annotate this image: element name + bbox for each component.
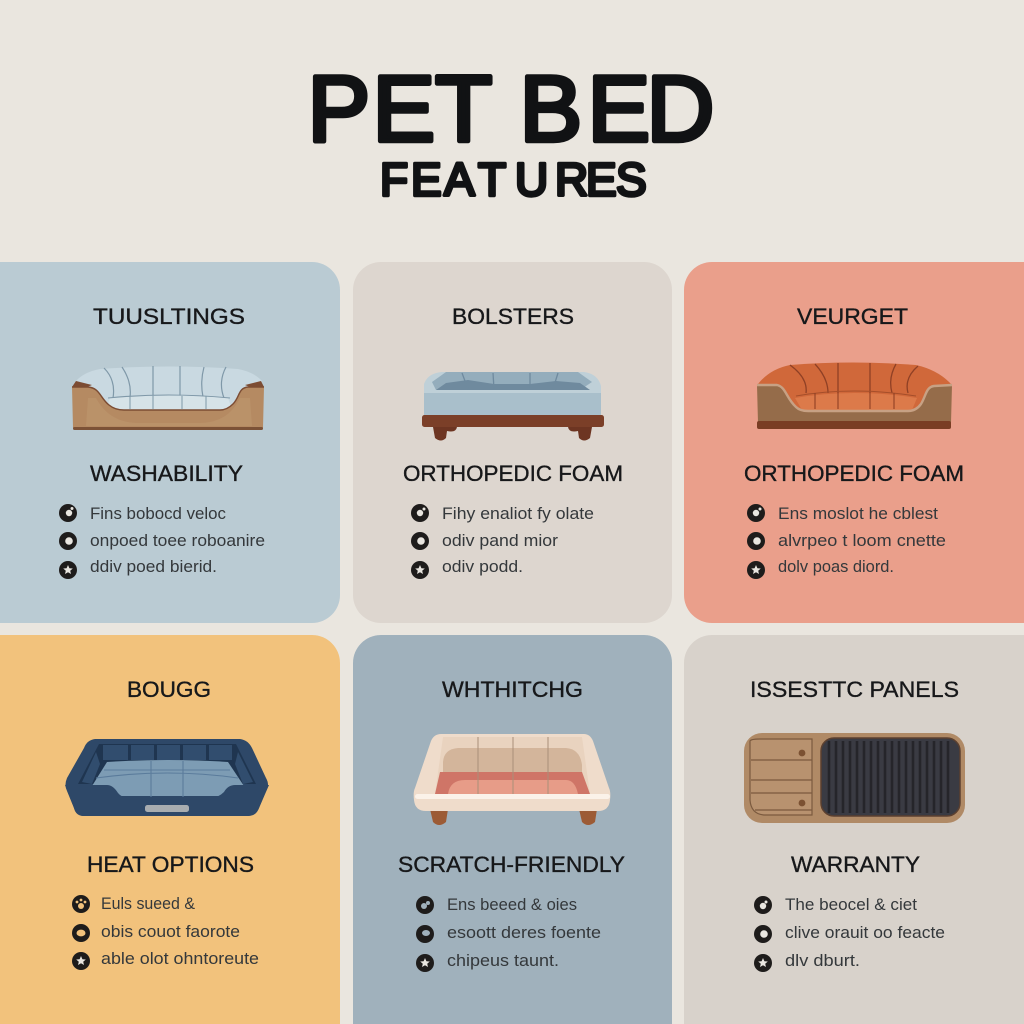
bullet icon xyxy=(411,504,429,522)
feature heading: WARRANTY xyxy=(791,852,920,877)
panel: tuusltings / washability xyxy=(0,262,340,623)
bullet icon xyxy=(416,896,434,914)
panel card xyxy=(0,262,340,623)
feature heading: HEAT OPTIONS xyxy=(87,852,254,877)
bullet icon xyxy=(59,504,77,522)
panel card xyxy=(684,262,1024,623)
bullet icon xyxy=(411,561,429,579)
bullet list xyxy=(747,504,946,579)
panel heading: TUUSLTINGS xyxy=(93,304,245,329)
bullet icon xyxy=(59,561,77,579)
bullet icon xyxy=(72,952,90,970)
bullet text: obis couot faorote xyxy=(101,923,240,941)
bullet list xyxy=(72,895,259,970)
feature heading: SCRATCH-FRIENDLY xyxy=(398,852,625,877)
panel heading: BOLSTERS xyxy=(452,304,574,329)
bullet text: onpoed toee roboanire xyxy=(90,532,265,550)
bullet icon xyxy=(411,532,429,550)
panel card xyxy=(684,635,1024,1024)
panel heading: VEURGET xyxy=(797,304,908,329)
bullet text: Fihy enaliot fy olate xyxy=(442,505,594,523)
bullet list xyxy=(411,504,594,579)
panel: bolsters / orthopedic foam xyxy=(353,262,672,623)
icon: brown sofa bed with orange cushions xyxy=(757,362,952,429)
panel heading: ISSESTTC PANELS xyxy=(750,677,959,702)
feature heading: WASHABILITY xyxy=(90,461,243,486)
bullet text: Ens beeed & oies xyxy=(447,896,577,914)
icon: raised blue bed on wooden frame xyxy=(422,372,604,440)
bullet icon xyxy=(416,925,434,943)
bullet list xyxy=(416,896,601,972)
bullet list xyxy=(59,504,265,579)
icon: navy rectangular bed xyxy=(65,739,269,816)
bullet text: dolv poas diord. xyxy=(778,558,894,576)
feature heading: ORTHOPEDIC FOAM xyxy=(403,461,623,486)
title xyxy=(308,56,714,206)
bullet text: Euls sueed & xyxy=(101,895,195,913)
bullet icon xyxy=(754,896,772,914)
bullet icon xyxy=(72,924,90,942)
feature heading: ORTHOPEDIC FOAM xyxy=(744,461,964,486)
panel: issesttc panels / warranty xyxy=(684,635,1024,1024)
bullet icon xyxy=(747,504,765,522)
bullet text: clive orauit oo feacte xyxy=(785,924,945,942)
bullet text: odiv podd. xyxy=(442,558,523,576)
bullet text: odiv pand mior xyxy=(442,532,559,550)
bullet text: Fins bobocd veloc xyxy=(90,505,226,523)
icon: cream tray bed on legs xyxy=(414,734,610,825)
bullet text: ddiv poed bierid. xyxy=(90,558,217,576)
panel: whthitchg / scratch-friendly xyxy=(353,635,672,1024)
bullet icon xyxy=(59,532,77,550)
icon: wooden panel with dark vent xyxy=(744,733,965,823)
title line: pet bed: PET BED xyxy=(308,56,714,161)
icon: tan sofa bed with pale blue cushions xyxy=(72,366,264,430)
bullet text: The beocel & ciet xyxy=(785,896,917,914)
bullet text: Ens moslot he cblest xyxy=(778,505,938,523)
bullet icon xyxy=(747,532,765,550)
panel: veurget / orthopedic foam xyxy=(684,262,1024,623)
bullet list xyxy=(754,896,945,972)
panel heading: WHTHITCHG xyxy=(442,677,583,702)
panel card xyxy=(353,262,672,623)
bullet icon xyxy=(416,954,434,972)
panel: bougg / heat options xyxy=(0,635,340,1024)
bullet icon xyxy=(747,561,765,579)
bullet text: alvrpeo t loom cnette xyxy=(778,532,946,550)
subtitle: features: FEATURES xyxy=(380,154,647,206)
panel card xyxy=(353,635,672,1024)
bullet icon xyxy=(72,895,90,913)
panel heading: BOUGG xyxy=(127,677,211,702)
bullet icon xyxy=(754,925,772,943)
bullet text: chipeus taunt. xyxy=(447,952,559,970)
bullet icon xyxy=(754,954,772,972)
bullet text: esoott deres foente xyxy=(447,924,601,942)
panel card xyxy=(0,635,340,1024)
bullet text: able olot ohntoreute xyxy=(101,950,259,968)
bullet text: dlv dburt. xyxy=(785,952,860,970)
